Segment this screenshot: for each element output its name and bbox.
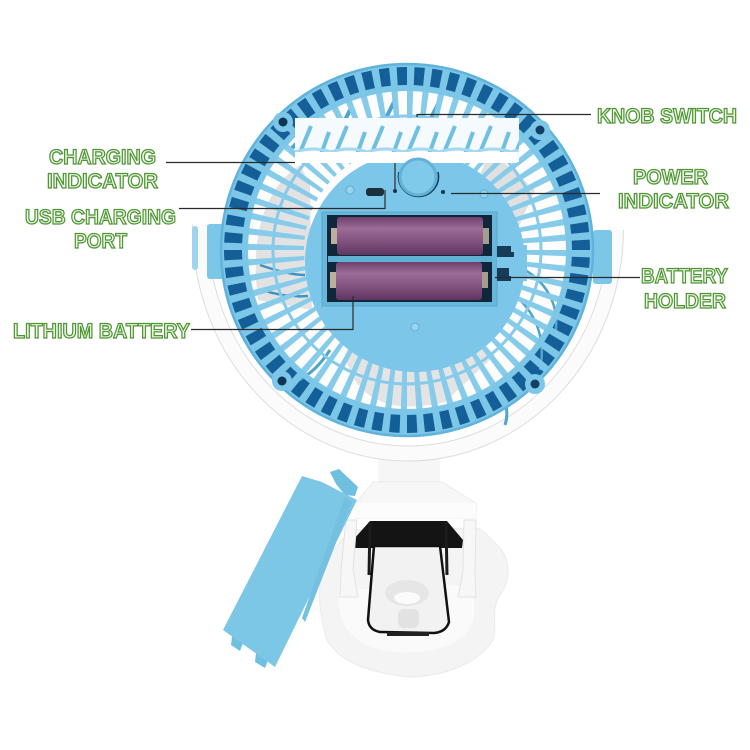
inner white opening <box>246 89 568 411</box>
label: battery holder <box>641 265 728 313</box>
label: battery holder: BATTERY <box>641 265 728 288</box>
label: usb charging port: USB CHARGING <box>25 206 176 229</box>
concentric rings <box>245 88 569 412</box>
label: power indicator <box>618 166 729 213</box>
clip inner tray <box>353 521 463 636</box>
clip neck and collar <box>355 455 476 518</box>
battery cover <box>223 469 358 668</box>
moulded marks <box>346 186 488 331</box>
knob <box>398 159 438 196</box>
usb port <box>366 188 384 196</box>
label: usb charging port <box>25 206 176 253</box>
label: knob switch: KNOB SWITCH <box>597 105 737 128</box>
retouched patch <box>295 118 519 163</box>
inner guard ribs <box>275 118 539 382</box>
label: battery holder: HOLDER <box>644 290 726 313</box>
label: charging indicator: INDICATOR <box>47 170 158 193</box>
leader lines <box>166 114 640 330</box>
fan blades <box>256 100 556 425</box>
clip base <box>320 455 508 677</box>
fan guard base <box>220 63 594 437</box>
label: charging indicator <box>47 146 158 193</box>
stand arc <box>200 225 616 454</box>
battery bottom <box>330 262 488 300</box>
outer guard ribs <box>233 76 581 424</box>
indicator dots <box>393 189 445 194</box>
battery compartment <box>322 212 497 306</box>
label: charging indicator: CHARGING <box>49 146 156 169</box>
fan guard dark outer ring <box>234 77 580 423</box>
label: lithium battery: LITHIUM BATTERY <box>13 320 190 343</box>
fan <box>220 63 594 437</box>
mount posts <box>272 112 550 394</box>
hub <box>305 152 527 372</box>
battery holder latch <box>497 245 527 281</box>
label: usb charging port: PORT <box>74 230 127 253</box>
label: power indicator: INDICATOR <box>618 190 729 213</box>
label: power indicator: POWER <box>633 166 708 189</box>
clip side arms <box>340 520 476 597</box>
battery top <box>331 217 489 255</box>
pivots <box>192 224 612 284</box>
